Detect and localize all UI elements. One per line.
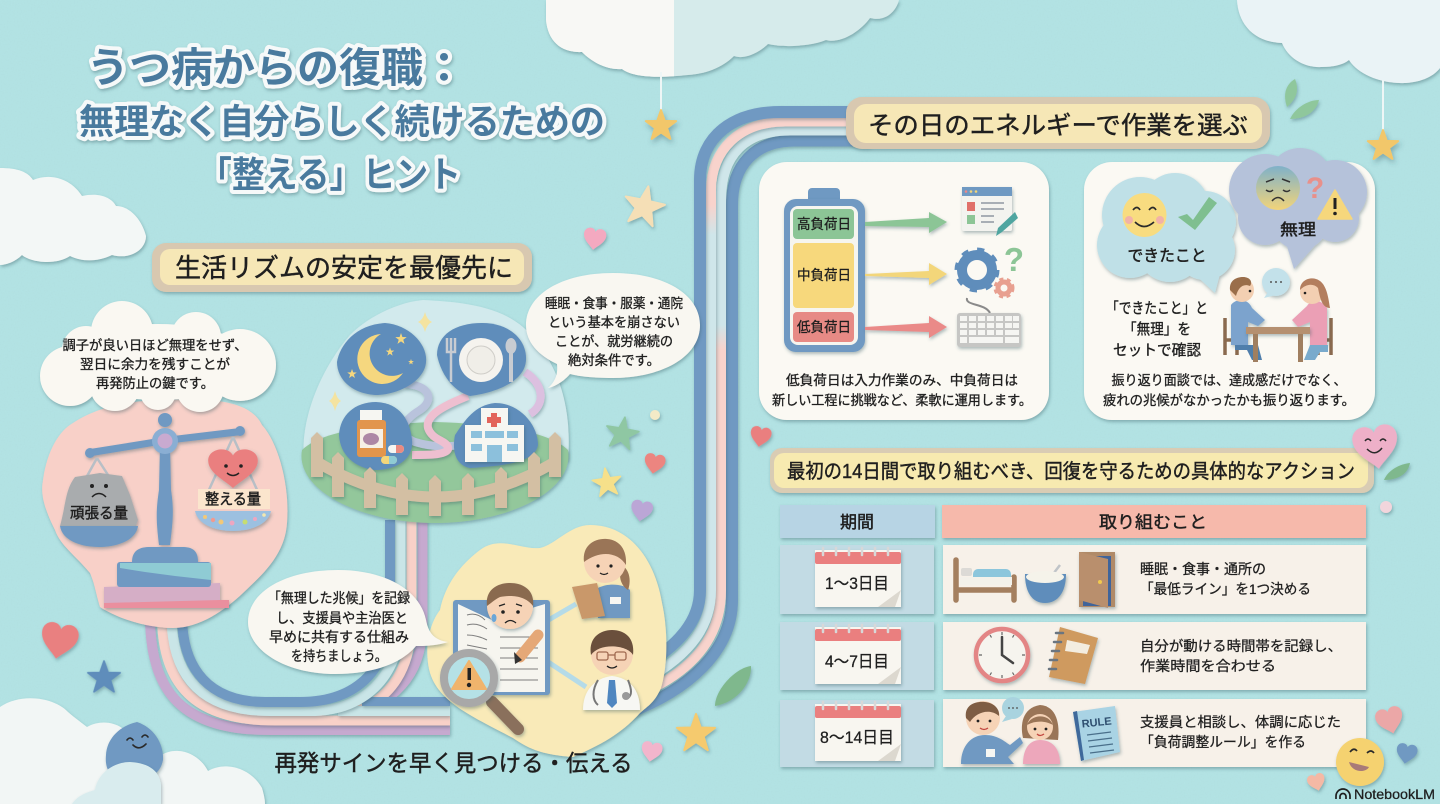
- scale stand: [85, 413, 245, 608]
- icon: hospital: [454, 403, 538, 468]
- icon: pencil: [514, 635, 538, 664]
- connectors: [545, 604, 586, 687]
- calendar: day 1-3: 1〜3日目: [825, 575, 889, 593]
- callout: routine basics: 絶対条件です。: [568, 352, 660, 368]
- icon: moon: [337, 323, 426, 395]
- icon: gears and question: ?: [1004, 241, 1024, 278]
- blue smiling blob: [106, 722, 163, 778]
- advice text: 再発防止の鍵です。: [96, 376, 214, 391]
- decorations: hearts: [38, 227, 1418, 793]
- heading: 14日間アクション: 最初の14日間で取り組むべき、回復を守るための具体的なアクション: [787, 460, 1355, 483]
- title: 「整える」ヒント: [199, 154, 461, 195]
- callout: record signs: 早めに共有する仕組み: [269, 629, 409, 645]
- action text: 支援員と相談し、体調に応じた: [1140, 714, 1341, 730]
- sparkle stars: [329, 312, 432, 411]
- icon: battery: 高負荷日: [797, 216, 851, 232]
- decorations: leaves and dots: [650, 79, 1410, 706]
- panel: balance scale: [40, 301, 288, 628]
- decorations: stars: [88, 182, 715, 750]
- icon: plate: [437, 323, 526, 396]
- icon: notebook: [1049, 627, 1098, 684]
- hanging star: top centre: [646, 72, 676, 139]
- heading: 生活リズムの安定を最優先に: [152, 243, 532, 292]
- callout: routine basics: 睡眠・食事・服薬・通院: [545, 296, 683, 311]
- callout: record signs: し、支援員や主治医と: [276, 610, 408, 626]
- icon: record book: [453, 600, 550, 695]
- heading: 生活リズムの安定を最優先に: 生活リズムの安定を最優先に: [175, 253, 513, 283]
- action text: 睡眠・食事・通所の: [1140, 561, 1266, 577]
- action text: 自分が動ける時間帯を記録し、: [1140, 638, 1342, 654]
- card text: [1103, 372, 1355, 408]
- green ground: [301, 422, 569, 523]
- calendar: day 8-14: [815, 702, 901, 761]
- table header: period: 期間: [840, 513, 874, 532]
- action text: 「最低ライン」を1つ決める: [1140, 581, 1311, 597]
- pink blob: [42, 399, 288, 628]
- ribbons: top right path: [625, 112, 870, 714]
- cloud: top centre: [546, 0, 899, 77]
- advice cloud: [40, 301, 276, 412]
- icon: medicine: [339, 402, 412, 470]
- action text: [1140, 561, 1311, 597]
- thought cloud: できたこと: できたこと: [1128, 247, 1206, 265]
- icon: nurse: [572, 539, 630, 619]
- illustration: interview at table: [1225, 268, 1331, 362]
- thought cloud: 無理: ?: [1306, 172, 1324, 205]
- callout: routine basics: [526, 273, 700, 388]
- yellow blob: [427, 525, 666, 757]
- icon: door: [1079, 552, 1115, 608]
- arrow: high load: [865, 212, 947, 233]
- right pan: recovery heart: 整える量: [205, 491, 261, 508]
- callout: record signs: [248, 570, 448, 674]
- callout: routine basics: ことが、就労継続の: [555, 333, 673, 349]
- cloud: bottom left: [0, 698, 265, 804]
- icon: battery: 低負荷日: [797, 319, 851, 335]
- icon: battery: 中負荷日: [797, 267, 851, 283]
- arrow: low load: [865, 316, 947, 338]
- summary text: 「無理」を: [1123, 321, 1191, 338]
- left pan: effort stone: [60, 458, 138, 547]
- table header: period: [780, 505, 935, 538]
- icon: RULE book: [1073, 706, 1120, 761]
- card text: 新しい工程に挑戦など、柔軟に運用します。: [772, 393, 1032, 408]
- heading: 14日間アクション: [770, 448, 1374, 493]
- icon: bowl: [1025, 565, 1066, 603]
- row 3: [780, 697, 1366, 767]
- panel: reflection interview: [1084, 148, 1375, 420]
- panel: early warning sign: [248, 525, 666, 757]
- icon: RULE book: RULE: [1081, 715, 1112, 731]
- row 1: [780, 545, 1366, 614]
- icon: clock: [976, 629, 1028, 681]
- icon: smiling heart: [1351, 423, 1401, 472]
- heading: 再発サインを早く見つける・伝える: 再発サインを早く見つける・伝える: [274, 750, 632, 776]
- panel: daily routine scene: [301, 300, 569, 523]
- action text: 「負荷調整ルール」を作る: [1140, 734, 1306, 750]
- panel: energy-based work choice: [759, 162, 1049, 420]
- callout: record signs: を持ちましょう。: [291, 648, 387, 664]
- path ribbons: [404, 372, 541, 455]
- heading: その日のエネルギーで作業を選ぶ: その日のエネルギーで作業を選ぶ: [868, 112, 1248, 140]
- calendar: day 1-3: [815, 548, 901, 607]
- summary text: 「できたこと」と: [1106, 300, 1208, 317]
- title: 無理なく自分らしく続けるための: [79, 103, 605, 142]
- icon: document editing: [962, 187, 1018, 236]
- pale blob: [303, 300, 569, 460]
- icon: gears and question: [957, 241, 1024, 297]
- card background: [1084, 162, 1375, 420]
- title: [79, 45, 605, 195]
- thought cloud: できたこと: [1097, 173, 1236, 293]
- card text: [772, 373, 1032, 408]
- thought cloud: 無理: 無理: [1280, 221, 1316, 239]
- row 2: [780, 622, 1366, 690]
- calendar: day 4-7: [815, 625, 901, 684]
- card text: 疲れの兆候がなかったかも振り返ります。: [1103, 393, 1355, 408]
- action text: 作業時間を合わせる: [1140, 658, 1276, 674]
- card text: 低負荷日は入力作業のみ、中負荷日は: [786, 373, 1018, 388]
- summary text: [1106, 300, 1208, 359]
- icon: keyboard: [957, 298, 1021, 347]
- calendar: day 8-14: 8〜14日目: [820, 729, 894, 747]
- summary text: セットで確認: [1113, 342, 1201, 359]
- right pan: recovery heart: [195, 437, 271, 531]
- advice text: 翌日に余力を残すことが: [80, 357, 231, 372]
- left pan: effort stone: 頑張る量: [70, 505, 128, 522]
- table header: actions: [942, 505, 1366, 538]
- logo: NotebookLM: NotebookLM: [1354, 786, 1435, 802]
- icon: worried person: [487, 583, 533, 629]
- table header: actions: 取り組むこと: [1099, 513, 1207, 532]
- arrow: mid load: [865, 263, 947, 285]
- title: うつ病からの復職：: [87, 45, 465, 91]
- card text: 振り返り面談では、達成感だけでなく、: [1112, 372, 1346, 388]
- icon: doctor: [583, 630, 640, 710]
- icon: battery: [784, 188, 865, 352]
- callout: routine basics: という基本を崩さない: [548, 314, 680, 330]
- advice text: 調子が良い日ほど無理をせず、: [62, 338, 248, 353]
- calendar: day 4-7: 4〜7日目: [825, 653, 889, 671]
- hanging star: top right: [1368, 80, 1398, 159]
- advice text: [62, 338, 248, 391]
- heading: その日のエネルギーで作業を選ぶ: [846, 97, 1270, 149]
- icon: magnifier with warning: [444, 653, 518, 729]
- callout: record signs: 「無理した兆候」を記録: [268, 590, 410, 606]
- icon: staff and user talking: [961, 697, 1060, 764]
- cloud: top right: [1237, 0, 1440, 83]
- cloud: left: [0, 168, 146, 265]
- icon: laughing face: [1336, 738, 1384, 786]
- card background: [759, 162, 1049, 420]
- panel: 14 day action table: [780, 505, 1366, 767]
- ribbons: bottom left path: [150, 520, 450, 730]
- fence: [311, 432, 561, 516]
- cloud: bottom left front: [72, 762, 161, 804]
- action text: [1140, 714, 1341, 750]
- thought cloud: 無理: [1229, 148, 1367, 269]
- icon: bed: [956, 560, 1014, 600]
- action text: [1140, 638, 1342, 674]
